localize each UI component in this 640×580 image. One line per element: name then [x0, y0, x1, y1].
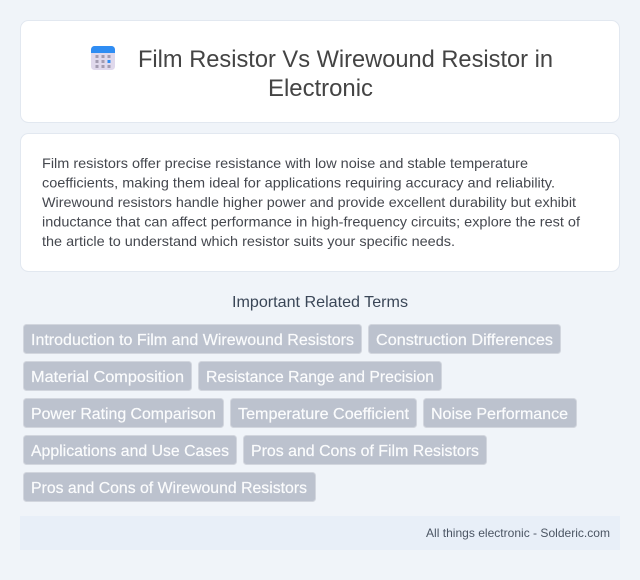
tag: power rating comparison: Power Rating Comparison [31, 406, 216, 423]
title: Film Resistor Vs Wirewound Resistor in [138, 46, 553, 73]
text block: summary: inductance that can affect performance in high-frequency circuits; explore the rest of [42, 214, 580, 230]
panel: title card [20, 20, 620, 122]
footer [20, 516, 620, 550]
tag: introduction [24, 324, 362, 354]
text block: summary: Film resistors offer precise resistance with low noise and stable temperature [42, 155, 528, 171]
text block: summary [42, 155, 580, 249]
tag: applications and use cases: Applications and Use Cases [31, 443, 229, 460]
tag: construction differences [368, 324, 560, 354]
tag: temperature coefficient [230, 398, 416, 428]
heading: important related terms: Important Related Terms [232, 294, 408, 311]
tag: construction differences: Construction Differences [376, 332, 553, 349]
text block: summary: the article to understand which resistor suits your specific needs. [42, 233, 455, 249]
tag: material composition: Material Composition [31, 369, 184, 386]
tag: material composition [24, 362, 192, 390]
tag: introduction: Introduction to Film and Wirewound Resistors [31, 332, 354, 349]
title [138, 46, 553, 102]
tag: noise performance: Noise Performance [431, 406, 568, 423]
tag: power rating comparison [24, 398, 224, 428]
footer: All things electronic - Solderic.com [426, 526, 610, 540]
tag: temperature coefficient: Temperature Coefficient [238, 406, 410, 423]
tag: resistance range and precision [198, 362, 442, 390]
icon: calendar [91, 46, 115, 70]
panel: related term tags [24, 324, 576, 502]
panel: summary card [20, 134, 620, 272]
tag: pros and cons of film resistors [244, 436, 486, 464]
tag: pros and cons of wirewound resistors [24, 472, 316, 502]
tag: pros and cons of film resistors: Pros and Cons of Film Resistors [251, 443, 479, 460]
title: Electronic [268, 75, 373, 102]
tag: pros and cons of wirewound resistors: Pros and Cons of Wirewound Resistors [31, 480, 307, 497]
text block: summary: coefficients, making them ideal for applications requiring accuracy and reliability. [42, 174, 555, 190]
tag: resistance range and precision: Resistance Range and Precision [206, 369, 434, 386]
tag: applications and use cases [24, 436, 236, 464]
text block: summary: Wirewound resistors handle higher power and provide excellent durability but exhibit [42, 194, 576, 210]
tag: noise performance [424, 398, 576, 428]
